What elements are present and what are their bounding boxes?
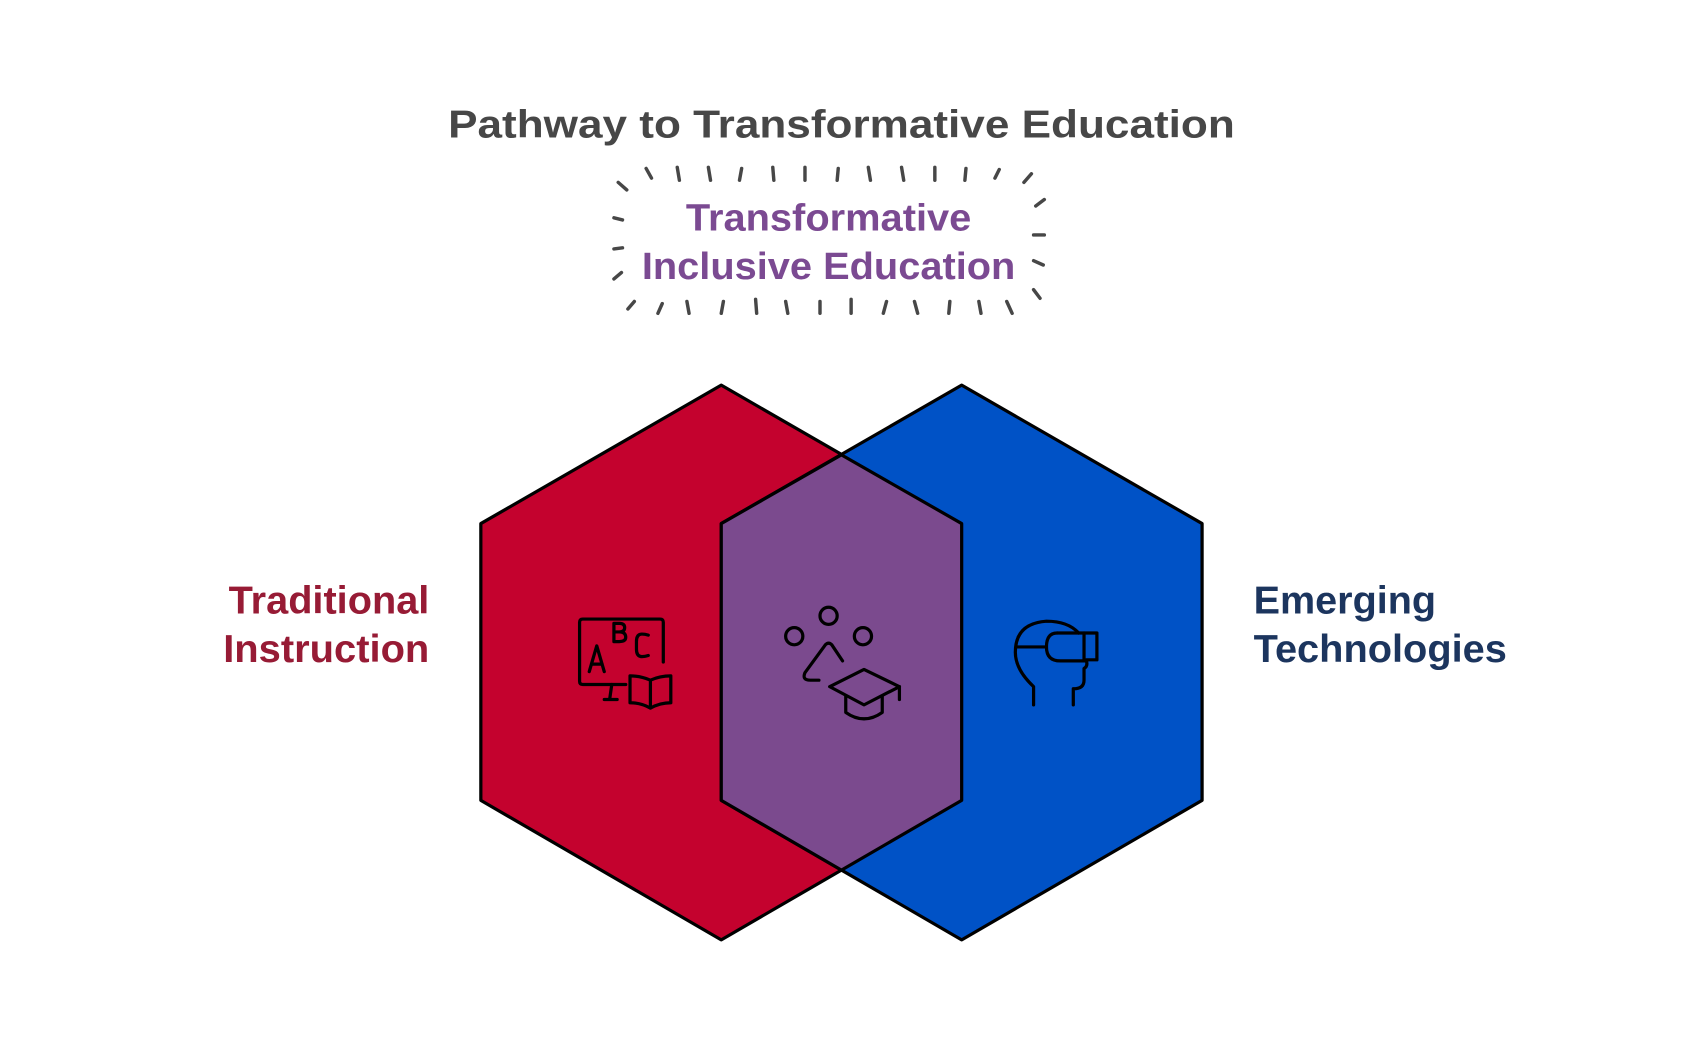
sunburst callout: transformative inclusive education: [614, 167, 1044, 313]
title: Pathway to Transformative Education: [448, 103, 1235, 146]
hexagon: traditional instruction: [481, 385, 962, 940]
text: Technologies: [1254, 628, 1507, 671]
sunburst callout: transformative inclusive education: Transformative: [686, 197, 971, 239]
label: emerging technologies: Emerging: [1254, 580, 1436, 623]
hexagon: emerging technologies: [721, 385, 1202, 940]
text: Instruction: [223, 628, 429, 671]
icon: VR headset head: [1015, 621, 1097, 705]
label: traditional instruction: Traditional: [229, 580, 429, 623]
icon: ABC board and book: [580, 619, 671, 708]
sunburst callout: transformative inclusive education: Inclusive Education: [642, 245, 1015, 287]
icon: inclusive learners with graduation cap: [786, 607, 899, 719]
hexagon overlap: transformative inclusive education: [721, 455, 962, 870]
